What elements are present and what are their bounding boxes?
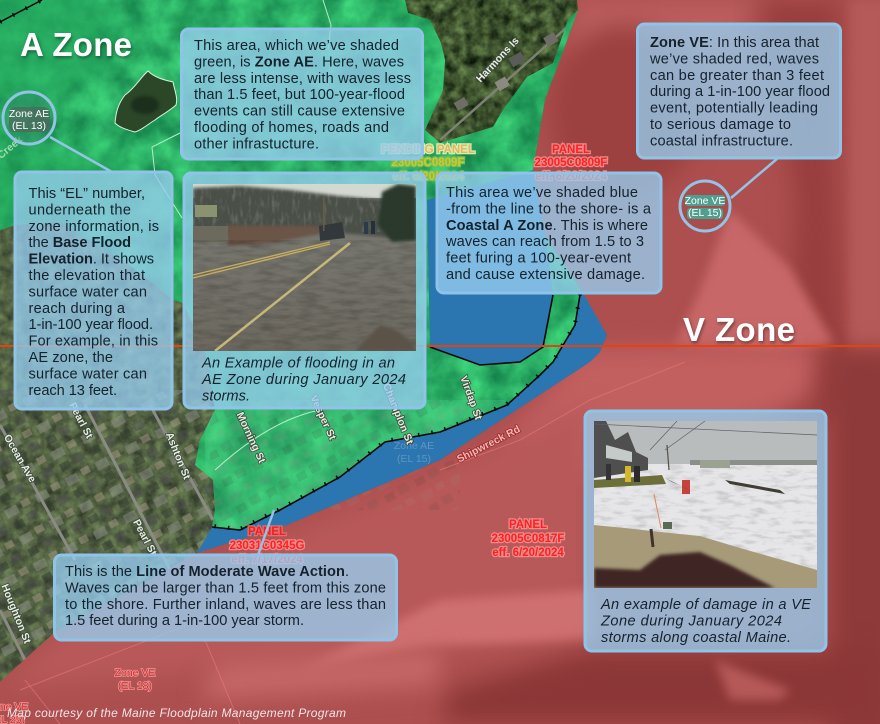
panel: zone VE explanation: [638, 24, 840, 158]
panel: coastal A zone explanation: and cause extensive damage.: [446, 267, 645, 283]
panel: zone AE explanation: events can still cause extensive: [194, 104, 405, 120]
panel: zone AE explanation: flooding of homes, roads and: [194, 120, 389, 136]
panel: line of moderate wave action explanation: Waves can be larger than 1.5 feet from this zone: [65, 580, 386, 596]
panel: base flood elevation explanation: [15, 172, 172, 409]
street labels: Champlon St: [380, 382, 416, 447]
panel: zone VE explanation: we’ve shaded red, waves: [649, 51, 819, 67]
map label: panel 23031C0345G: [230, 526, 304, 566]
street labels: [0, 35, 522, 646]
map label: zone AE elevation 15: (EL 15): [397, 453, 431, 465]
map label: panel 23005C0809F: 23005C0809F: [535, 157, 607, 169]
callout marker: zone VE EL 15: [680, 158, 778, 231]
line of moderate wave action: [0, 0, 580, 530]
map label: pending panel: eff. 6/20/2024: [392, 171, 464, 183]
green AE flood zone: [0, 0, 580, 530]
map label: panel 23005C0809F: [535, 144, 607, 183]
map labels: zone VE elevation 18: Zone VE: [115, 667, 155, 679]
photo: flooded road: [193, 184, 416, 351]
street labels: Ashton St: [163, 431, 193, 482]
callout marker: zone VE EL 15: (EL 15): [688, 207, 722, 219]
panel: zone AE explanation: [182, 29, 422, 159]
map label: zone AE elevation 15: [394, 440, 434, 465]
panel: coastal A zone explanation: [437, 173, 661, 293]
panel: zone AE explanation: than 1.5 feet, but 100-year-flood: [194, 87, 405, 103]
map label: pending panel: PENDING PANEL: [381, 144, 475, 156]
map label: panel 23005C0817F: [492, 519, 564, 559]
panel: zone VE explanation: coastal infrastructure.: [650, 133, 793, 149]
panel: base flood elevation explanation: 1-in-100 year flood.: [28, 317, 153, 333]
panel: base flood elevation explanation: reach 13 feet.: [28, 383, 117, 399]
panel: base flood elevation explanation: For example, in this: [28, 334, 158, 350]
caption: VE zone photo: [600, 597, 811, 646]
panel: base flood elevation explanation: zone information, is: [28, 219, 159, 235]
panel: base flood elevation explanation: surface water can: [28, 366, 147, 382]
map label: panel 23005C0817F: 23005C0817F: [492, 533, 564, 545]
callout marker: zone VE EL 15: Zone VE: [685, 195, 725, 207]
blue coastal A zone: [197, 170, 607, 553]
panel: coastal A zone explanation: -from the line to the shore- is a: [446, 201, 652, 217]
map labels: zone VE elevation 18: [0, 667, 155, 724]
street labels: Vesper St: [307, 394, 338, 442]
map label: panel 23005C0817F: eff. 6/20/2024: [492, 547, 564, 559]
panel: base flood elevation explanation: reach during a: [28, 301, 126, 317]
panel: base flood elevation explanation: AE zone, the: [28, 350, 113, 366]
map label: zone AE elevation 15: Zone AE: [394, 440, 434, 452]
street labels: Pearl St: [130, 518, 159, 558]
map label: panel 23031C0345G: 23031C0345G: [230, 540, 304, 552]
island of unflooded land: [115, 71, 177, 132]
panel: base flood elevation explanation: surface water can: [28, 284, 147, 300]
street labels: Virdap St: [457, 374, 484, 422]
heading: A Zone: A Zone: [20, 26, 132, 63]
panel: base flood elevation explanation: the Base Flood: [28, 235, 131, 251]
panel: zone AE explanation: other infrastucture.: [194, 136, 319, 152]
panel: zone AE explanation: are less intense, with waves less: [194, 71, 411, 87]
street labels: Harmons Is: [474, 35, 522, 85]
callout marker: zone AE EL 13: (EL 13): [12, 120, 46, 132]
panel: base flood elevation explanation: This “EL” number,: [28, 186, 145, 202]
panel: zone VE explanation: can be greater than 3 feet: [650, 68, 824, 84]
map label: panel 23031C0345G: PANEL: [248, 526, 286, 538]
panel: VE zone damage photo: [585, 411, 826, 651]
callout marker: zone AE EL 13: Zone AE: [9, 108, 49, 120]
panel: line of moderate wave action explanation: 1.5 feet during a 1-in-100 year storm.: [65, 613, 304, 629]
panel: line of moderate wave action explanation: This is the Line of Moderate Wave Action.: [65, 564, 349, 580]
panel: zone VE explanation: to serious damage to: [650, 117, 791, 133]
panel: zone VE explanation: Zone VE: In this area that: [650, 35, 819, 51]
caption: AE zone photo: AE Zone during January 2024: [201, 372, 406, 388]
map label: panel 23005C0817F: PANEL: [509, 519, 547, 531]
map label: panel 23005C0809F: PANEL: [552, 144, 590, 156]
street labels: Ocean Ave: [1, 432, 38, 485]
street labels: Morning St: [234, 410, 268, 466]
callout marker: zone AE EL 13: [3, 92, 112, 172]
panel: base flood elevation explanation: Elevation. It shows: [28, 252, 154, 268]
map label: panel 23005C0809F: eff. 6/20/2024: [535, 171, 607, 183]
heading: V Zone: V Zone: [683, 311, 795, 348]
map label: panel 23031C0345G: eff. 7/17/2024: [231, 554, 303, 566]
map label: pending panel: [381, 144, 475, 183]
caption: AE zone photo: storms.: [202, 388, 250, 404]
orange horizontal reference line: [0, 345, 880, 347]
panel: line of moderate wave action explanation: [54, 555, 396, 640]
panel: zone AE explanation: This area, which we’ve shaded: [194, 38, 399, 54]
panel: coastal A zone explanation: Coastal A Zone. This is where: [446, 218, 648, 234]
panel: coastal A zone explanation: waves can reach from 1.5 to 3: [445, 234, 644, 250]
panel: zone VE explanation: during a 1-in-100 year flood: [650, 84, 830, 100]
caption: AE zone photo: [201, 356, 406, 404]
panel: line of moderate wave action explanation: to the shore. Further inland, waves are less than: [65, 597, 386, 613]
map credit: Map courtesy of the Maine Floodplain Management Program: [7, 706, 346, 720]
photo: storm damage: [594, 421, 817, 588]
pointer to line of moderate wave action: [258, 510, 274, 555]
caption: VE zone photo: storms along coastal Maine.: [601, 630, 791, 646]
panel: base flood elevation explanation: underneath the: [28, 202, 131, 218]
street labels: Pearl St: [66, 401, 95, 441]
map label: pending panel: 23005C0809F: [392, 157, 464, 169]
panel: coastal A zone explanation: feet furing a 100-year-event: [446, 251, 631, 267]
panel: AE zone flood photo: [184, 173, 425, 408]
street labels: Shipwreck Rd: [455, 423, 522, 465]
panel: base flood elevation explanation: the elevation that: [28, 268, 145, 284]
caption: AE zone photo: An Example of flooding in an: [201, 356, 395, 372]
caption: VE zone photo: An example of damage in a VE: [600, 597, 811, 613]
caption: VE zone photo: Zone during January 2024: [600, 613, 782, 629]
map labels: zone VE elevation 18: (EL 18): [118, 680, 152, 692]
panel: zone VE explanation: event, potentially leading: [650, 101, 818, 117]
panel: coastal A zone explanation: This area we’ve shaded blue: [446, 185, 638, 201]
panel: zone AE explanation: green, is Zone AE. Here, waves: [194, 54, 404, 70]
